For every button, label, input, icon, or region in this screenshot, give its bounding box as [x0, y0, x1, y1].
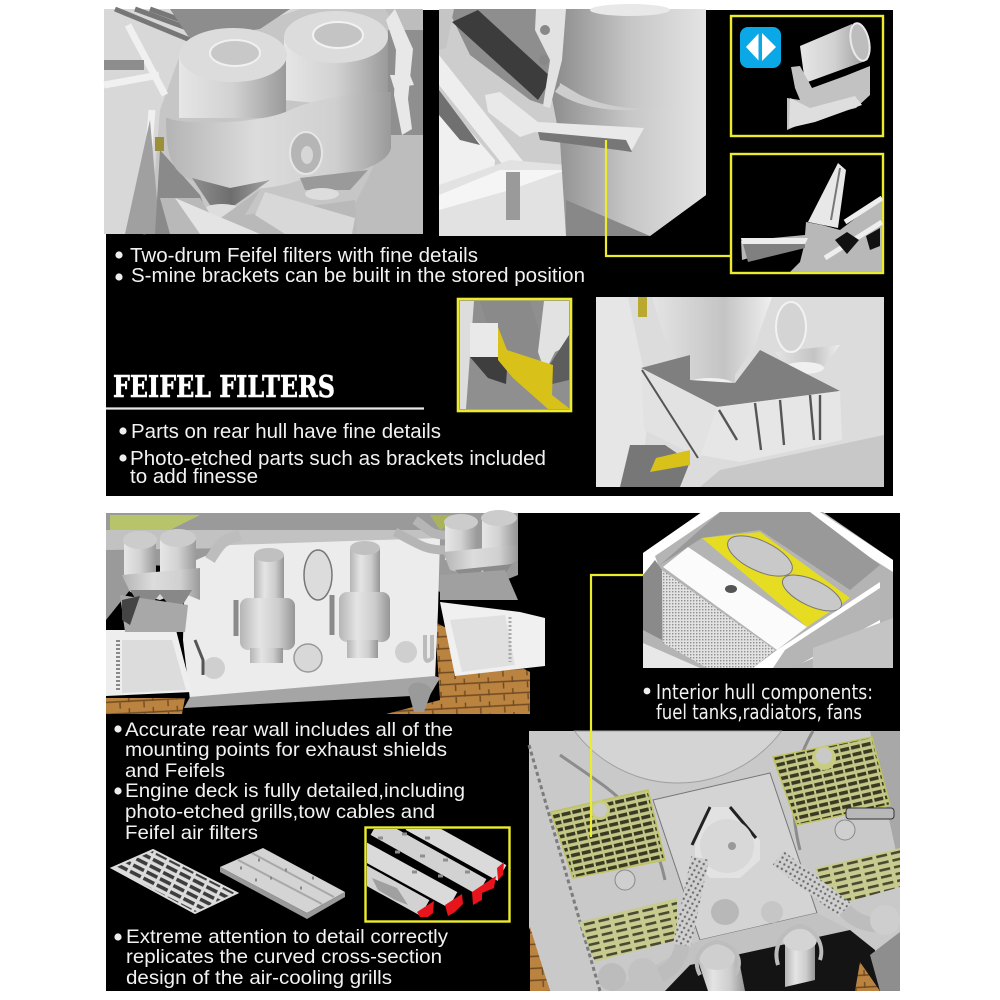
- tow shackles: [195, 635, 432, 679]
- oval plate: [304, 550, 332, 600]
- bullets: rear wall and engine deck text: Engine deck is fully detailed,including: [125, 780, 465, 802]
- bullets: rear wall and engine deck text: and Feifels: [125, 760, 225, 782]
- part: tube on bracket: [787, 22, 873, 130]
- bracket arm: [485, 9, 644, 152]
- bullets: lower text: [119, 421, 546, 488]
- grill: lower right: [815, 848, 900, 907]
- round cover: [294, 644, 322, 672]
- title: FEIFEL FILTERS: [113, 370, 335, 405]
- turret ring: [574, 731, 782, 783]
- bricks: [106, 622, 530, 714]
- exhaust elbows: [210, 535, 240, 560]
- left exhaust mount: [236, 548, 295, 663]
- part: grill cover: [220, 848, 345, 919]
- rear edge and right wall: [870, 731, 900, 870]
- inset: curved grill cross-section: [360, 822, 510, 922]
- photo: rear hull wall: [106, 510, 545, 714]
- bullets: lower text: Parts on rear hull have fine details: [131, 421, 441, 443]
- photo: S-mine bracket close-up: [439, 4, 706, 236]
- label: interior hull components: fuel tanks,radiators, fans: [656, 700, 862, 724]
- bullets: lower text: to add finesse: [130, 466, 258, 488]
- exhaust tube right: [778, 858, 845, 910]
- bullets: rear wall and engine deck text: Feifel air filters: [125, 822, 258, 844]
- hub: [692, 807, 760, 878]
- label: interior hull components: [644, 680, 873, 724]
- photo: rear hull stowage boxes: [596, 297, 884, 487]
- connector: yellow bracket line: [606, 140, 730, 256]
- lower filter body: [166, 92, 391, 218]
- bullets: top text: S-mine brackets can be built in the stored position: [131, 265, 585, 287]
- left drum: [179, 28, 287, 118]
- grill: lower left: [579, 898, 677, 962]
- inset: bracket deployed: [731, 154, 883, 273]
- grill: upper left: [551, 790, 665, 878]
- exhaust tube left: [682, 858, 700, 945]
- bullets: rear wall and engine deck text: mounting points for exhaust shields: [125, 739, 447, 761]
- bullets: rear wall and engine deck text: [114, 719, 465, 844]
- ribs: [360, 822, 502, 908]
- bullets: cross-section text: Extreme attention to detail correctly: [126, 926, 448, 948]
- icon: blue part-swap badge: [740, 27, 781, 68]
- right Feifel: [440, 510, 518, 600]
- part: spike bracket: [741, 163, 882, 272]
- raised centre panel: [653, 773, 817, 940]
- part: photo-etched grill: [112, 850, 237, 913]
- inset: photo-etched bracket: [458, 299, 571, 411]
- red cut ends: [417, 862, 504, 917]
- bullets: cross-section text: design of the air-cooling grills: [126, 967, 392, 989]
- connector: yellow radiator line: [591, 575, 643, 837]
- panel: top black Feifel filters: [104, 4, 893, 496]
- bullets: cross-section text: [114, 926, 448, 989]
- rear plate lower: [610, 913, 880, 991]
- bullets: lower text: Photo-etched parts such as brackets included: [130, 448, 546, 470]
- photo: two-drum Feifel filter: [104, 9, 423, 234]
- big drum: [550, 4, 706, 236]
- exhaust mufflers: [598, 899, 900, 991]
- yellow fan shroud: [702, 528, 850, 627]
- label: interior hull components: Interior hull components:: [656, 680, 873, 704]
- right exhaust mount: [332, 541, 390, 658]
- cables: [560, 755, 665, 880]
- bullets: top text: [115, 245, 585, 287]
- bullets: top text: Two-drum Feifel filters with fine details: [130, 245, 478, 267]
- bullets: rear wall and engine deck text: photo-etched grills,tow cables and: [125, 801, 435, 823]
- left fender: [106, 630, 192, 696]
- bullets: rear wall and engine deck text: Accurate rear wall includes all of the: [125, 719, 453, 741]
- grill: upper right: [773, 737, 890, 825]
- bullets: cross-section text: replicates the curved cross-section: [126, 946, 442, 968]
- left Feifel: [120, 529, 200, 632]
- inset: interior radiator and fans: [643, 512, 893, 668]
- panel: bottom black engine deck: [106, 510, 900, 991]
- rear plate: [183, 538, 440, 700]
- photo: engine deck from above: [529, 731, 900, 991]
- right drum: [284, 11, 388, 110]
- right fender: [440, 602, 545, 676]
- inset: bracket stowed: [731, 16, 883, 136]
